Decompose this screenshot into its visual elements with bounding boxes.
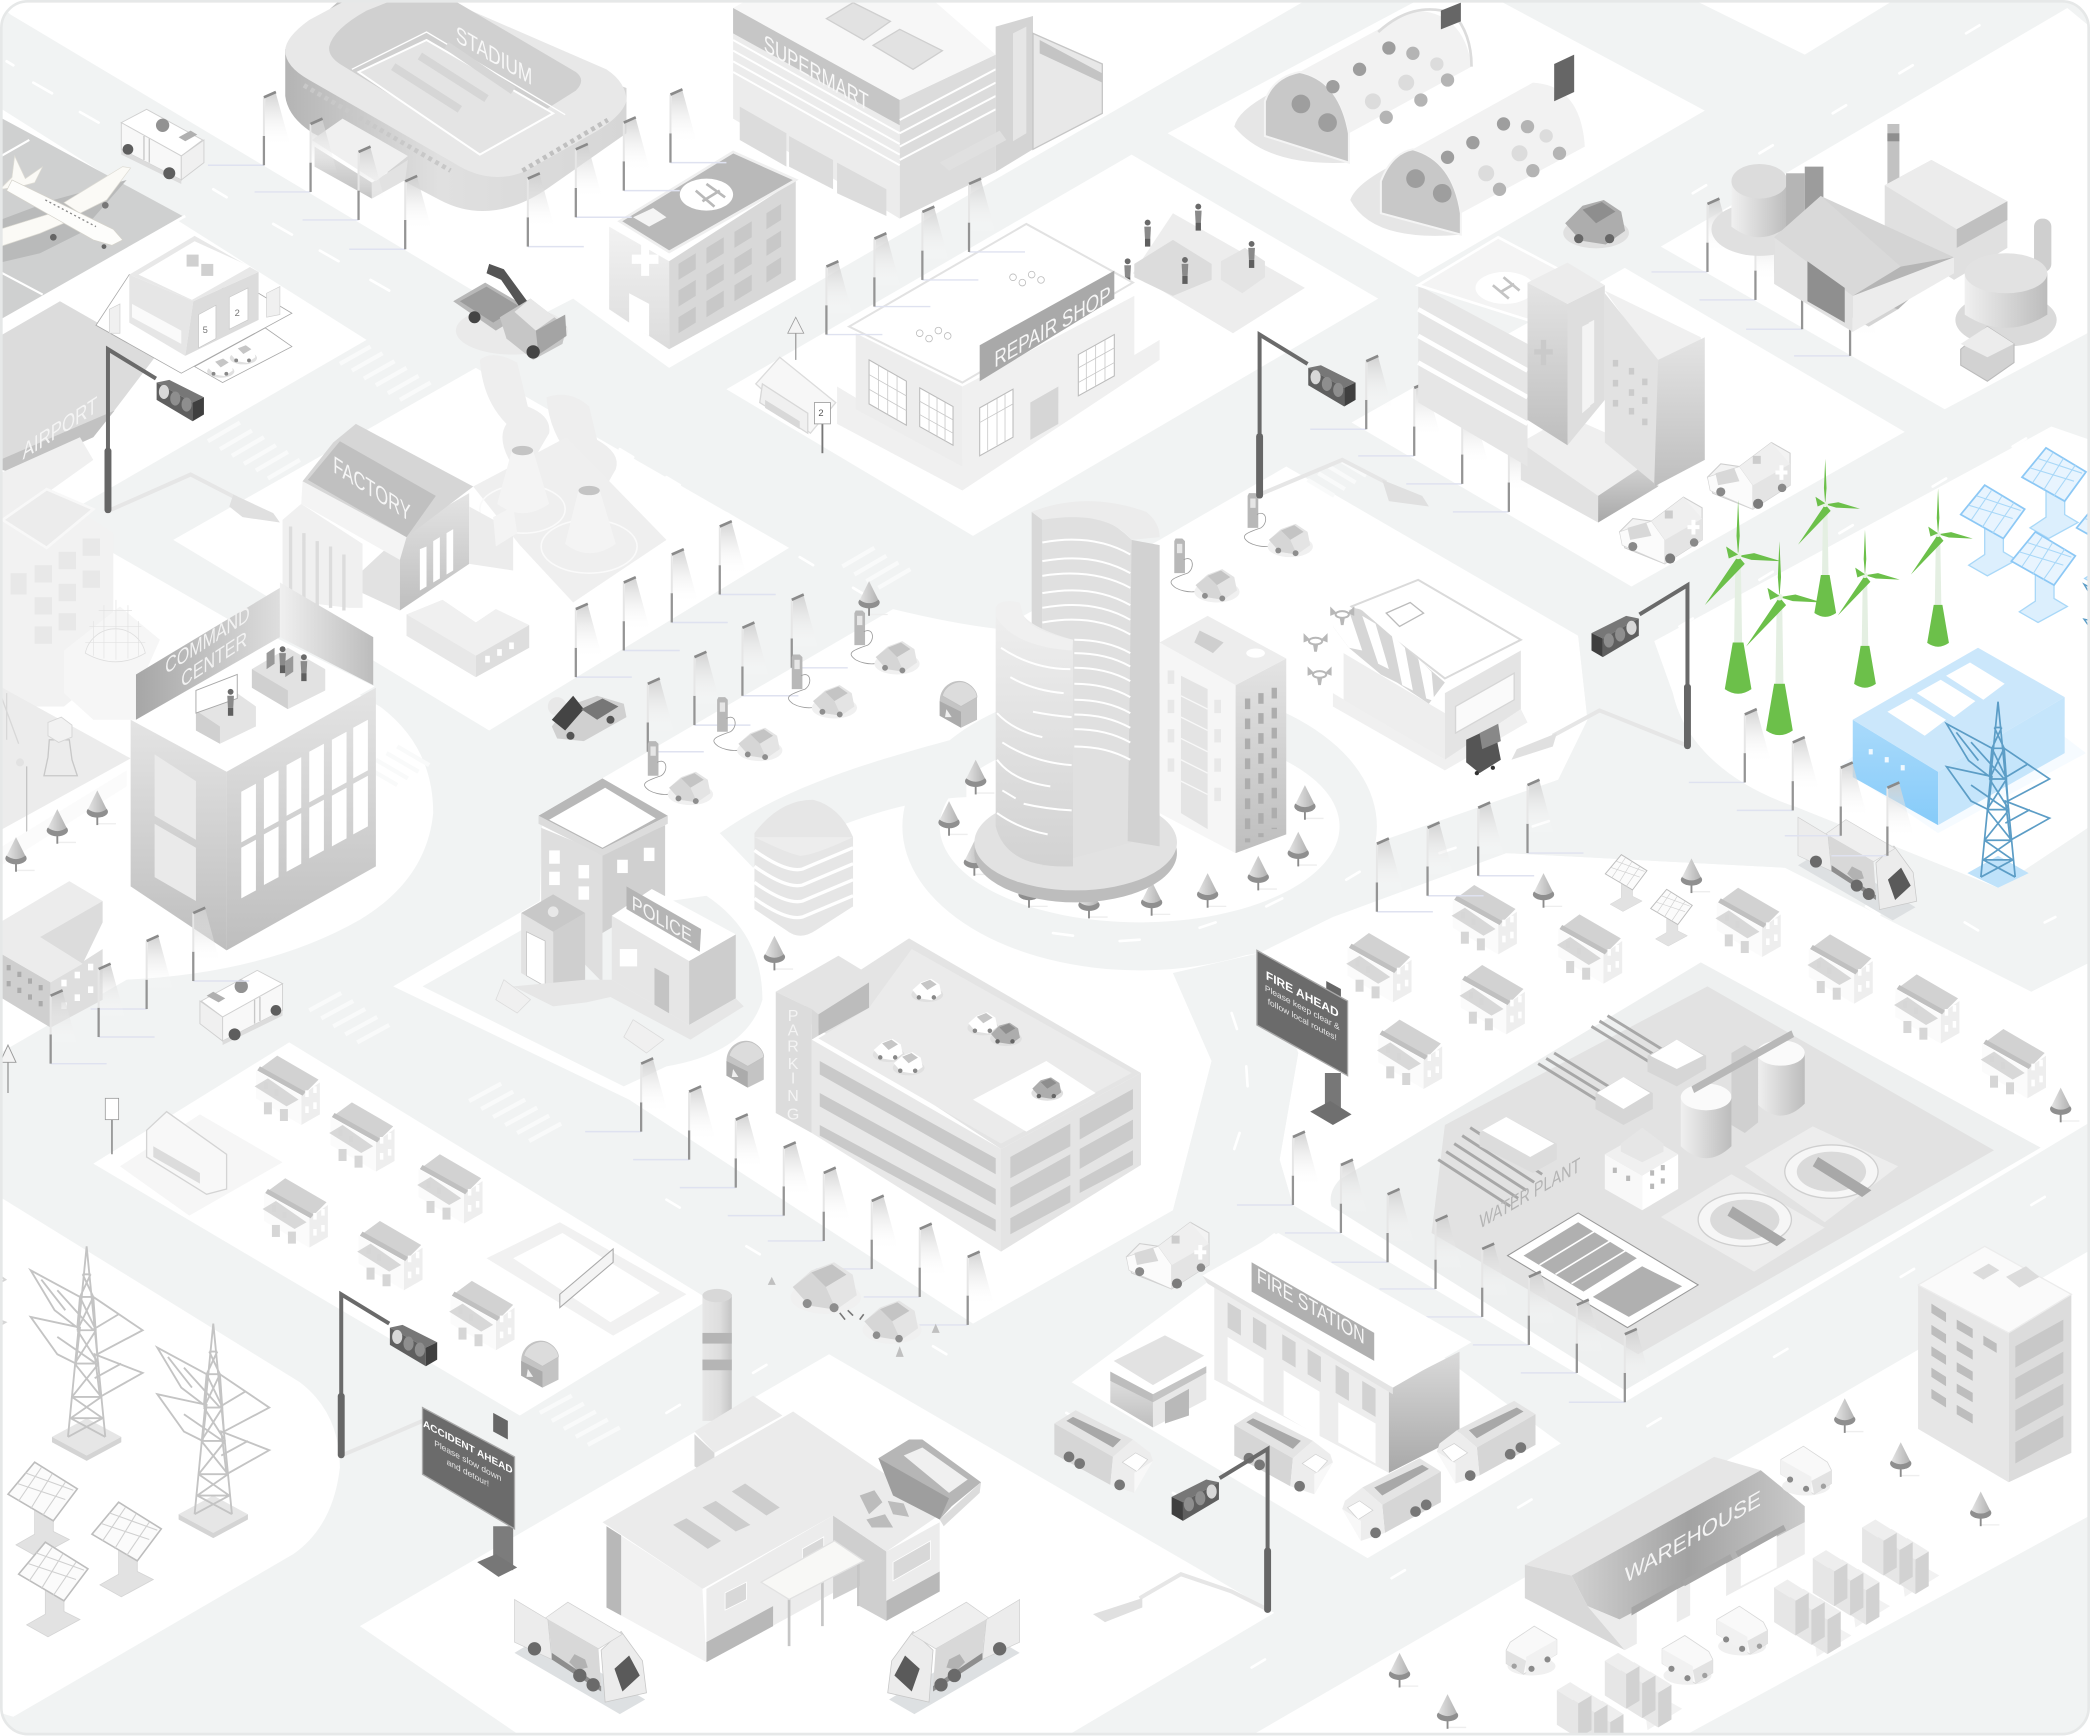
- billboard: fire ahead: follow local routes!: [1268, 997, 1337, 1043]
- ambulance: fire station: [1126, 1222, 1209, 1289]
- label: parking: A: [788, 1023, 799, 1040]
- street lamps: [208, 89, 1877, 512]
- control desks and operators: [196, 646, 325, 744]
- fire station: [1202, 1233, 1472, 1473]
- tall residential block: [1918, 1246, 2071, 1482]
- tow truck: [453, 264, 568, 360]
- delivery drones: [1304, 606, 1354, 685]
- billboard: accident ahead: Please slow down: [434, 1438, 501, 1483]
- solar panels: grey: [8, 1462, 161, 1637]
- delivery trucks: [1506, 1446, 1831, 1685]
- silos and gantry: [1681, 1030, 1805, 1158]
- pylon: blue: [1947, 566, 2090, 888]
- corner store: [1333, 580, 1528, 770]
- factory annex: [407, 600, 529, 677]
- pipes and intake units: [1438, 1016, 1677, 1206]
- label: parking: P: [788, 1008, 798, 1025]
- billboard: fire ahead: Please keep clear &: [1265, 983, 1340, 1032]
- label: supermart: SUPERMART: [764, 29, 869, 117]
- label: fire station: FIRE STATION: [1257, 1264, 1365, 1350]
- trees: [5, 581, 2079, 1729]
- label: parking: K: [788, 1056, 799, 1073]
- solar panels: blue: [1961, 448, 2090, 622]
- houses: [255, 885, 2046, 1350]
- bottom-left L-shaped building: [0, 881, 103, 1028]
- car crash: [768, 1262, 940, 1357]
- pylons: grey: [0, 1196, 269, 1538]
- label: repair shop: REPAIR SHOP: [994, 281, 1111, 373]
- label: police: POLICE: [632, 892, 692, 949]
- label: parking: I: [791, 1071, 795, 1088]
- lamps: wind farm and ring road: [1377, 709, 1914, 912]
- dumpster: [1466, 724, 1501, 775]
- label: parking: N: [787, 1088, 799, 1105]
- service building with parking: 2: [235, 308, 240, 318]
- greenhouse info boards: [1441, 3, 1574, 101]
- traffic light: store: [1512, 585, 1691, 760]
- plant office: [1605, 1128, 1678, 1210]
- repair shop: [837, 224, 1160, 491]
- billboard: accident ahead: ACCIDENT AHEAD: [423, 1418, 513, 1477]
- bus stop: houses: [105, 1098, 283, 1216]
- traffic light: airport junction: [104, 349, 280, 523]
- label: command center: CENTER: [181, 627, 247, 693]
- bus stop: repair shop: 2: [818, 408, 824, 418]
- ambulances: [1619, 443, 1790, 564]
- cooling towers: [473, 437, 666, 602]
- stadium entrance: [312, 119, 408, 199]
- fire trucks: [1054, 1401, 1536, 1541]
- antenna lot: [0, 686, 131, 866]
- stacked round building: [754, 800, 853, 936]
- police lot: [423, 896, 762, 1086]
- repair shop lot and workers: [1124, 204, 1305, 333]
- crosswalks: [208, 347, 1366, 1445]
- greenhouse 1: [1234, 9, 1472, 163]
- autonomous shuttle: top: [121, 109, 204, 184]
- billboard: fire ahead: [1257, 950, 1352, 1125]
- billboard: fire ahead: FIRE AHEAD: [1266, 968, 1339, 1021]
- supermart: [733, 0, 1102, 219]
- filter beds: [1508, 1213, 1698, 1328]
- label: parking: R: [787, 1039, 799, 1056]
- canopy: [761, 1541, 864, 1646]
- EV charging row: [576, 493, 1313, 805]
- recycling bins: [521, 681, 977, 1388]
- factory: [283, 424, 517, 610]
- broken-down car: [548, 696, 626, 741]
- police station: [496, 778, 744, 1053]
- stadium: [285, 0, 626, 211]
- wind turbines: [1705, 459, 1973, 735]
- label: water plant: WATER PLANT: [1480, 1152, 1580, 1233]
- autonomous shuttle: bottom: [200, 970, 283, 1045]
- power substation: blue building: [1839, 648, 2086, 833]
- apartment tower: [1160, 616, 1286, 853]
- clarifiers: [1661, 1126, 1898, 1272]
- label: stadium: STADIUM: [456, 20, 532, 91]
- service building with parking: [96, 236, 292, 383]
- recycling centre: [602, 1289, 981, 1662]
- service building with parking: 5: [203, 325, 208, 335]
- runway and airport apron: [0, 117, 185, 321]
- lamps: water plant: [1237, 1132, 1651, 1402]
- label: command center: COMMAND: [165, 602, 250, 680]
- small solar panels: [1605, 855, 1692, 946]
- label: warehouse: WAREHOUSE: [1625, 1485, 1761, 1588]
- tennis court: [487, 1222, 686, 1336]
- road sign: [0, 1045, 16, 1093]
- traffic light: north centre: [1256, 335, 1429, 507]
- fire station garage: [1110, 1334, 1206, 1428]
- traffic light: fire station: [1093, 1449, 1271, 1622]
- skip container: [878, 1440, 981, 1526]
- label: factory: FACTORY: [333, 450, 411, 528]
- ring road: [720, 712, 1588, 986]
- pallets: [1557, 1520, 1939, 1736]
- airplane: [0, 156, 131, 263]
- hospital: north west: [609, 152, 796, 349]
- airport terminal: [0, 301, 156, 527]
- refinery plant: [1711, 124, 2057, 381]
- recycling icon: [860, 1490, 909, 1528]
- left office and observatory dome: [0, 489, 160, 720]
- command center: [131, 582, 376, 950]
- warehouse: [1525, 1457, 1805, 1650]
- taxi: [1563, 200, 1629, 248]
- factory smoke: [481, 371, 616, 481]
- parking garage: [776, 938, 1141, 1252]
- billboard: accident ahead: and detour!: [447, 1457, 489, 1489]
- hospital: north east: [1418, 237, 1705, 523]
- label: airport: AIRPORT: [23, 391, 97, 465]
- label: parking: [787, 1008, 799, 1124]
- water plant: [1331, 962, 2041, 1390]
- lamps along parking: [585, 1058, 994, 1325]
- label: parking: G: [787, 1107, 799, 1124]
- billboard: accident ahead: [423, 1408, 517, 1577]
- traffic light: houses: [338, 1294, 437, 1458]
- street lamps: west: [51, 908, 249, 1064]
- central tower: [974, 501, 1177, 902]
- greenhouse 2: [1350, 83, 1585, 236]
- bus stop: repair shop: [756, 317, 836, 453]
- garbage trucks: [515, 817, 1917, 1714]
- chimney: [702, 1289, 732, 1421]
